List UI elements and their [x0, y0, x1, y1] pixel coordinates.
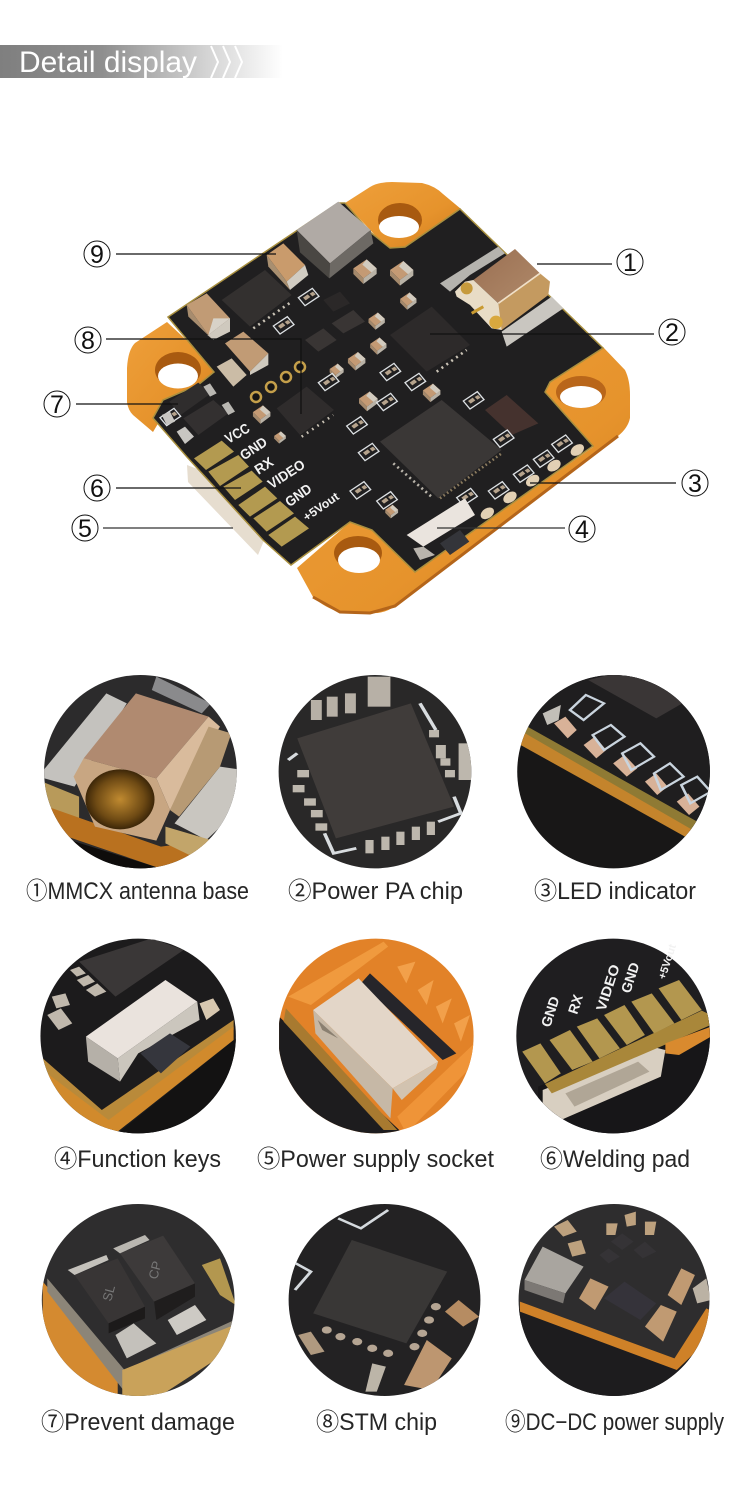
diode markings in photo 7: SL [99, 1284, 118, 1303]
pad labels: GND [237, 433, 270, 463]
callout 6: Welding pad [84, 475, 241, 503]
gold corner: left [127, 322, 214, 432]
silver antenna pads [440, 247, 563, 347]
callout 9: DC-DC power supply: 9 [90, 241, 104, 269]
white power connector under board [187, 465, 265, 555]
detail photo 2: Power PA chip [278, 675, 472, 868]
pad labels: RX [251, 453, 277, 478]
diode markings in photo 7 [99, 1259, 165, 1303]
caption 7: ⑦Prevent damage [41, 1409, 235, 1436]
pad labels: VIDEO [265, 456, 308, 492]
brown chip [485, 395, 538, 435]
MMCX connector on board [455, 249, 550, 330]
caption 8: ⑧STM chip [316, 1409, 437, 1436]
inductor [297, 202, 373, 278]
pad labels: +5Vout [300, 489, 342, 524]
callout 8: STM chip: 8 [81, 327, 95, 355]
callout 8: STM chip [75, 327, 301, 414]
pad labels: GND [282, 480, 315, 510]
detail photo 5: Power supply socket [279, 937, 479, 1137]
callout 3: LED indicator: 3 [688, 470, 702, 498]
flight controller board photo [127, 182, 630, 613]
header banner: Detail display: Detail display [19, 46, 197, 79]
pad labels [222, 420, 342, 524]
callout 5: Power supply socket: 5 [78, 515, 92, 543]
callout 6: Welding pad: 6 [90, 475, 104, 503]
caption 6: ⑥Welding pad [540, 1146, 690, 1173]
gold corners: right and bottom [297, 347, 630, 613]
callout 7: Prevent damage [44, 391, 178, 419]
small ceramic capacitors [253, 259, 440, 518]
callout 4: Function keys: 4 [575, 516, 589, 544]
pad labels: VCC [222, 420, 252, 447]
callout 1: MMCX antenna base: 1 [623, 249, 637, 277]
diode markings in photo 7: CP [145, 1259, 165, 1281]
caption 3: ③LED indicator [534, 878, 696, 905]
detail photo 8: STM chip [288, 1202, 484, 1402]
caption 5: ⑤Power supply socket [257, 1146, 494, 1173]
callout 7: Prevent damage: 7 [50, 391, 64, 419]
detail photo 4: Function keys [38, 937, 243, 1137]
callout 5: Power supply socket [72, 515, 233, 543]
callout 3: LED indicator [530, 470, 708, 498]
chip pin rows [253, 302, 502, 498]
pad labels in photo 6: +5Vout [656, 943, 679, 981]
small dark regulators [305, 292, 365, 352]
callout 1: MMCX antenna base [537, 249, 643, 277]
detail photo 7: Prevent damage [38, 1202, 238, 1402]
detail photo 3: LED indicator [517, 675, 710, 868]
caption 1: ①MMCX antenna base [26, 878, 249, 905]
dark chip: DC-DC [222, 270, 292, 327]
detail photo 1: MMCX antenna base [44, 675, 237, 868]
pad labels in photo 6 [538, 943, 679, 1029]
detail photo 9: DC-DC power supply [518, 1202, 713, 1402]
header banner: Detail display [0, 45, 283, 79]
TVS diodes [162, 383, 235, 444]
dark chip: main processor [380, 400, 502, 498]
detail photo 6: Welding pad [515, 937, 711, 1137]
pad labels in photo 6: GND [618, 960, 642, 995]
LED row [478, 442, 586, 522]
callout 9: DC-DC power supply [84, 241, 276, 269]
dark chip: power PA [390, 307, 470, 372]
via rings [251, 362, 305, 402]
callout 2: Power PA chip [430, 319, 685, 347]
callout 2: Power PA chip: 2 [665, 319, 679, 347]
function switch [407, 498, 475, 560]
gold corner: top [345, 182, 461, 250]
caption 2: ②Power PA chip [288, 878, 463, 905]
large ceramic capacitors [187, 243, 308, 387]
dark chip: STM [277, 387, 334, 435]
silkscreen component outlines [160, 288, 572, 509]
pad labels in photo 6: GND [538, 994, 562, 1029]
callout 4: Function keys [437, 516, 595, 544]
gold solder pads [194, 441, 309, 547]
pad labels in photo 6: VIDEO [593, 962, 623, 1013]
pad labels in photo 6: RX [565, 992, 586, 1016]
black PCB [153, 203, 603, 572]
caption 4: ④Function keys [54, 1146, 221, 1173]
